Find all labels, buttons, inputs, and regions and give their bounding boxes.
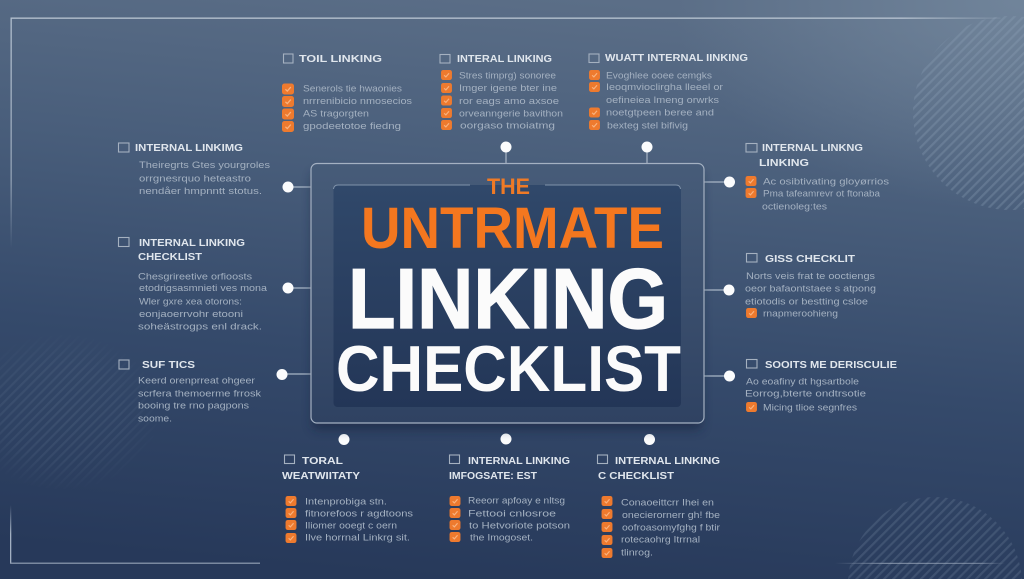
text lines (621, 498, 720, 558)
text lines: rnapmeroohieng (763, 308, 838, 320)
text lines: octienoleg:tes (762, 202, 827, 212)
text lines: rotecaohrg Itrrnal (621, 534, 700, 546)
text lines: Senerols tie hwaonies (303, 84, 402, 94)
heading: THE: THE (487, 174, 530, 199)
checkbox (450, 455, 460, 464)
inner panel (334, 185, 681, 407)
panel: bottom right (598, 455, 720, 558)
decorative hatched circle top right (913, 16, 1024, 210)
text lines: Norts veis frat te ooctiengs (746, 271, 875, 282)
checkbox (118, 143, 129, 152)
heading: GISS CHECKLIT (765, 253, 856, 265)
text lines: oefineiea lmeng orwrks (606, 95, 719, 106)
panel: top right (589, 52, 748, 132)
check icon (746, 402, 757, 412)
panel: bottom right: C CHECKLIST (598, 470, 675, 482)
checkbox (746, 360, 757, 368)
checkbox (284, 455, 294, 464)
text lines: gpodeetotoe fiedng (303, 121, 401, 132)
text lines: Intenprobiga stn. (305, 496, 387, 508)
text lines: orrgnesrquo heteastro (139, 174, 251, 184)
text lines: scrfera themoerme frrosk (138, 388, 261, 400)
text lines (762, 176, 889, 212)
text lines: to Hetvoriote potson (469, 520, 570, 532)
check icons (450, 496, 460, 542)
check icons (589, 70, 600, 130)
heading: UNTRMATE: UNTRMATE (361, 196, 664, 261)
text lines: etodrigsasmnieti ves mona (139, 283, 268, 294)
check icons (286, 496, 296, 543)
text lines: fitnorefoos r agdtoons (305, 508, 413, 520)
text lines: nendåer hmpnntt stotus. (139, 186, 262, 197)
text lines: oofroasomyfghg f btir (622, 522, 720, 534)
text lines: Ao eoafiny dt hgsartbole (746, 376, 859, 388)
text lines: nrrrenibicio nmosecios (303, 96, 412, 107)
text lines (745, 271, 876, 320)
text lines: soheästrogps enl drack. (138, 322, 262, 332)
check icons (746, 176, 756, 198)
check icon (746, 308, 757, 318)
text lines: oorgaso tmoiatmg (460, 120, 555, 132)
connectors and nodes (276, 142, 735, 445)
text lines: Eorrog,bterte ondtrsotie (745, 388, 866, 400)
check icons (441, 70, 452, 130)
text lines: Ieoqmvioclirgha lleeel or (606, 82, 723, 93)
heading: INTERNAL LINKING (139, 237, 245, 249)
panel: left lower (119, 359, 261, 424)
text lines: Chesgrireetive orfioosts (138, 272, 252, 282)
text lines (459, 70, 563, 132)
check icons (602, 496, 612, 558)
text lines: AS tragorgten (303, 108, 369, 120)
panel: bottom left: WEATWIITATY (282, 470, 360, 482)
text lines: oeor bafaontstaee s atpong (745, 284, 876, 294)
heading: INTERNAL LINKIMG (135, 142, 243, 154)
text lines (745, 376, 866, 414)
text lines: Fettooi cnlosroe (468, 508, 556, 520)
text lines: onecierornerr gh! fbe (622, 510, 720, 521)
text lines (139, 160, 270, 197)
decorative hatched circle bottom right (848, 497, 1022, 579)
panel: right upper: LINKING (759, 157, 809, 169)
text lines: tlinrog. (621, 548, 653, 558)
heading: TORAL (302, 455, 344, 467)
central title panel (311, 164, 704, 423)
text lines (606, 70, 723, 132)
text lines: Iliomer ooegt c oern (305, 520, 397, 532)
panel: left upper (118, 142, 270, 197)
heading: SUF TICS (142, 359, 195, 371)
panel: top center (440, 53, 563, 132)
panel: left middle (118, 237, 268, 332)
panel: bottom center (449, 455, 570, 544)
panel: right upper (746, 142, 889, 212)
text lines (138, 376, 261, 424)
panel shadow (312, 172, 702, 430)
heading: INTERNAL LINKNG (762, 142, 863, 154)
text lines: Ilve horrnal Linkrg sit. (305, 532, 410, 544)
text lines: Wler gxre xea otorons: (139, 296, 242, 308)
inner panel top rule (334, 185, 680, 189)
text lines: eonjaoerrvohr etooni (139, 309, 243, 320)
text lines: etiotodis or bestting csloe (745, 296, 868, 308)
checkbox (598, 455, 608, 464)
text lines: Reeorr apfoay e nltsg (468, 496, 565, 506)
heading: INTERAL LINKING (457, 53, 552, 65)
check icons (282, 84, 294, 132)
heading: CHECKLIST: CHECKLIST (336, 332, 681, 405)
heading: INTERNAL LINKING (615, 455, 720, 467)
text lines: Keerd orenprreat ohgeer (138, 376, 255, 386)
checkbox (589, 54, 599, 62)
text lines: ror eags amo axsoe (459, 96, 559, 107)
text lines: bexteg stel bifivig (607, 120, 688, 132)
text lines: Micing tlioe segnfres (763, 402, 857, 414)
checkbox (284, 54, 293, 63)
checkbox (440, 54, 450, 63)
text lines (303, 84, 412, 132)
heading: WUATT INTERNAL IINKING (605, 52, 748, 64)
panel: left middle: CHECKLIST (138, 251, 203, 263)
panel: top left (282, 53, 412, 132)
heading: TOIL LINKING (299, 53, 382, 65)
checkbox (119, 360, 129, 369)
text lines: noetgtpeen beree and (606, 108, 714, 118)
checkbox (118, 238, 129, 246)
text lines (468, 496, 570, 544)
panel: right lower (745, 359, 897, 414)
text lines: orveanngerie bavithon (459, 108, 563, 120)
heading: INTERNAL LINKING (468, 455, 570, 467)
heading: LINKING: LINKING (348, 252, 668, 347)
text lines: Imger igene bter ine (459, 83, 557, 94)
decorative hatched area bottom left (0, 361, 127, 465)
text lines: Pma tafeamrevr ot ftonaba (763, 188, 881, 200)
text lines: Theiregrts Gtes yourgroles (139, 160, 270, 171)
text lines: Ac osibtivating gloyørrios (763, 176, 889, 188)
outer panel (311, 164, 704, 423)
text lines: Stres timprg) sonoree (459, 70, 556, 82)
text lines (305, 496, 413, 544)
checkbox (746, 254, 757, 262)
checkbox (746, 144, 757, 152)
panel: bottom center: IMFOGSATE: EST (449, 470, 538, 482)
text lines: Evoghlee ooee cemgks (606, 70, 712, 82)
panel: right middle (745, 253, 876, 320)
panel: bottom left (282, 455, 413, 544)
text lines (138, 272, 268, 332)
text lines: the Imogoset. (470, 532, 533, 544)
text lines: Conaoeittcrr Ihei en (621, 498, 714, 508)
text lines: soome. (138, 414, 172, 424)
text lines: booing tre rno pagpons (138, 400, 249, 412)
heading: SOOITS ME DERISCULIE (765, 359, 897, 371)
